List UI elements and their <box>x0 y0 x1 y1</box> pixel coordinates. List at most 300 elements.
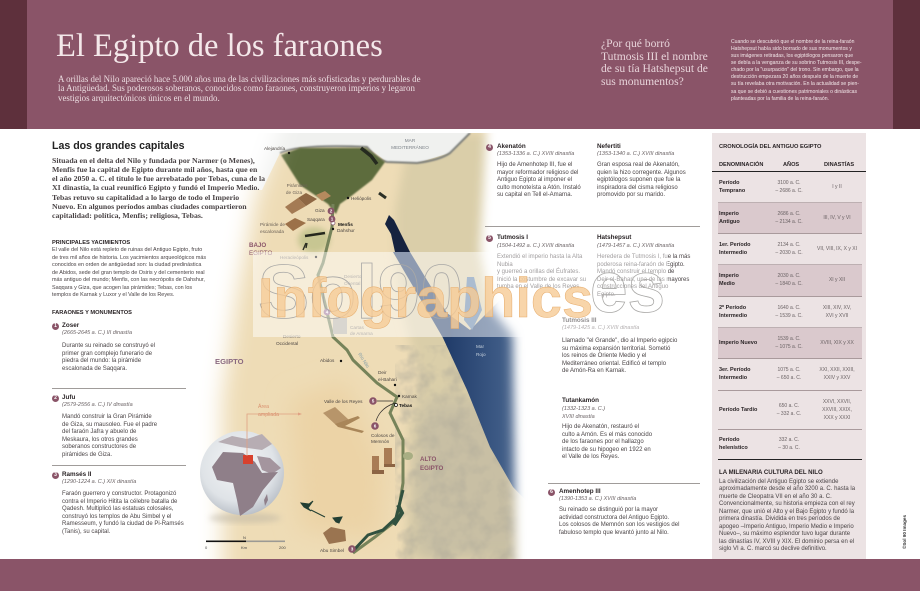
description <box>562 424 652 460</box>
map labels: el-Bahari <box>378 377 397 382</box>
icon: colossi of Memnon <box>372 448 395 474</box>
row: Período Tardío: – 332 a. C. <box>777 411 801 417</box>
capitals text: Nuevo. En algunos períodos ambas ciudades compartieron <box>52 202 247 211</box>
row: Período Temprano: I y II <box>832 184 842 190</box>
dates: (1479-1457 a. C.) XVIII dinastía <box>597 243 674 249</box>
watermark: Sol90 <box>258 250 463 335</box>
dates: (1504-1492 a. C.) XVIII dinastía <box>497 243 574 249</box>
description <box>562 338 678 374</box>
locator globe <box>200 431 284 523</box>
number marker <box>52 472 59 479</box>
map labels: Karnak <box>402 394 418 399</box>
map labels: Alejandría <box>264 146 286 151</box>
description: Llamado "el Grande", dio al Imperio egipcio <box>562 338 677 344</box>
description: Egipto. <box>597 292 616 298</box>
number marker <box>52 395 59 402</box>
map number markers: 1 <box>331 217 334 222</box>
description: pirámides de Giza. <box>62 452 112 458</box>
scale bar: N <box>243 535 246 540</box>
map labels: Cartas <box>350 325 364 330</box>
row: Período helenístico: 332 a. C. <box>779 437 799 443</box>
row: Período helenístico: – 30 a. C. <box>778 445 800 451</box>
heading: capitals: Las dos grandes capitales <box>52 140 184 152</box>
number marker: 4 <box>488 144 491 150</box>
footer band <box>0 559 920 591</box>
description: Los colosos de Memnón son los vestigios del <box>559 522 679 528</box>
row: Período Tardío: Período Tardío <box>719 407 757 413</box>
capitals text: Menfis fue la capital de Egipto durante mil años, hasta que en <box>52 165 257 174</box>
description: los reinos de Oriente Medio y el <box>562 353 646 359</box>
description: piedra del mundo: la pirámide <box>62 358 141 364</box>
description: Hijo de Amenhotep III, fue el <box>497 162 572 168</box>
map labels: Río Nilo <box>357 352 370 369</box>
side answer: sus imágenes retiradas, los egiptólogos pensaron que <box>731 53 853 59</box>
row: 3er. Período Intermedio: XXI, XXII, XXIII, <box>819 367 855 373</box>
main sites text: templos de Karnak y Luxor y el Valle de los Reyes. <box>52 292 174 298</box>
number marker: 3 <box>54 472 57 478</box>
map labels <box>260 138 486 553</box>
description: Mediterráneo oriental. Edificó el templo <box>562 360 666 366</box>
map labels: Heracleópolis <box>280 255 309 260</box>
dates: (1353-1336 a. C.) XVIII dinastía <box>497 151 574 157</box>
intro text <box>58 74 421 103</box>
map labels: Menfis <box>338 222 353 227</box>
label: Egipto: EGIPTO <box>215 357 244 366</box>
culture text: Narmer, que unió el Alto y el Bajo Egipto y fundó la <box>719 508 854 514</box>
number marker: 5 <box>488 235 491 241</box>
description: su máxima expansión territorial. Sometió <box>562 346 670 352</box>
callout: enlarged area: ampliada <box>258 412 279 418</box>
name: Tutmosis III <box>562 317 597 324</box>
description: (Tanis), su capital. <box>62 528 110 534</box>
name: Amenhotep III <box>559 488 601 495</box>
row: Período Tardío: 650 a. C. <box>779 403 799 409</box>
description: intacto de su hipogeo en 1922 en <box>562 446 651 452</box>
culture text <box>719 478 856 552</box>
main sites text <box>52 247 206 298</box>
description: Antiguo Egipto al imponer el <box>497 177 572 183</box>
panel: chronology <box>712 133 866 559</box>
number marker <box>486 235 493 242</box>
left dark strip <box>0 0 27 129</box>
row: Período Tardío <box>718 391 862 430</box>
description: de los faraones por el hallazgo <box>562 439 644 445</box>
name: Jufu <box>62 394 75 401</box>
side answer: Hatshepsut había sido borrado de sus monumentos y <box>731 46 852 52</box>
row: Imperio Antiguo: Antiguo <box>719 219 740 225</box>
row: 2º Período Intermedio: XVI y XVII <box>826 313 848 319</box>
description: Extendió el imperio hasta la Alta <box>497 254 582 260</box>
image credit: ©Sol 90 Images <box>902 515 907 549</box>
description: Qadesh. Multiplicó las estatuas colosales, <box>62 506 173 512</box>
description: primer gran complejo funerario de <box>62 350 152 356</box>
dates <box>562 406 605 420</box>
pharaoh: Nefertiti <box>597 143 686 198</box>
row: Imperio Nuevo: 1539 a. C. <box>777 336 801 342</box>
culture text: Convencionalmente, su historia empieza con el rey <box>719 501 855 507</box>
side answer: chado por la "usurpación" del trono. Sin embargo, que la <box>731 67 859 73</box>
map number markers: 6 <box>374 424 377 429</box>
number marker <box>52 323 59 330</box>
culture text: las dinastías IV, XVIII y XIX. El dominio persa en el <box>719 538 854 544</box>
row: Período Tardío: XXVIII, XXIX, <box>822 407 852 413</box>
panel: left column <box>52 140 265 316</box>
row: Imperio Antiguo: Imperio <box>719 211 739 217</box>
watermark: es <box>590 250 665 328</box>
description: Deir el-Bahari, una de las mayores <box>597 276 689 282</box>
description <box>62 490 184 534</box>
map labels: Desierto <box>344 274 362 279</box>
row: Imperio Medio: XI y XII <box>829 277 845 283</box>
map number markers: 3 <box>351 547 354 552</box>
nile <box>318 204 403 553</box>
row: Imperio Medio: 2030 a. C. <box>777 273 801 279</box>
description: y guerreó a orillas del Éufrates. <box>497 269 580 275</box>
map of Egypt <box>200 133 523 559</box>
dates: (1390-1353 a. C.) XVIII dinastía <box>559 496 636 502</box>
row: Imperio Antiguo: III, IV, V y VI <box>823 215 851 221</box>
row: 1er. Período Intermedio: 2134 a. C. <box>777 242 801 248</box>
map labels: Dahshur <box>337 228 355 233</box>
side answer <box>731 39 862 102</box>
map labels: Rojo <box>476 352 486 357</box>
side question: ¿Por qué borró <box>601 37 670 50</box>
red sea <box>443 304 522 496</box>
capitals text: el año 2050 a. C. el título le fue arrebatado por Tebas, cuna de la <box>52 174 265 183</box>
text block: Nile culture <box>719 469 856 552</box>
row: 2º Período Intermedio: 1640 a. C. <box>777 305 801 311</box>
intro text: vestigios arquitectónicos únicos en el mundo. <box>58 93 220 103</box>
pharaoh: Amenhotep III <box>548 488 680 536</box>
row: 2º Período Intermedio: – 1539 a. C. <box>775 313 803 319</box>
description: quien la hizo corregente. Algunos <box>597 170 686 176</box>
label: Bajo Egipto <box>249 242 272 257</box>
description: Faraón guerrero y constructor. Protagonizó <box>62 491 176 497</box>
scale bar: 200 <box>279 545 286 550</box>
main sites text: conocidos en orden de antigüedad son: la ciudad predinástica <box>52 262 201 268</box>
row: Imperio Nuevo: – 1075 a. C. <box>775 344 803 350</box>
watermark <box>258 250 665 335</box>
toshka lakes <box>301 501 342 523</box>
description: fabuloso templo que levantó junto al Nilo. <box>559 530 669 536</box>
icon: valley of the kings tomb <box>323 407 364 433</box>
culture text: apogeo –Imperio Antiguo, Imperio Medio e Imperio <box>719 524 854 530</box>
culture heading: LA MILENARIA CULTURA DEL NILO <box>719 469 823 476</box>
capitals text: XI dinastía, la cual reunificó Egipto y fundó el Imperio Medio. <box>52 183 259 192</box>
row: Imperio Nuevo <box>718 328 862 359</box>
map labels: Deir <box>378 370 387 375</box>
row: Período Tardío: XXX y XXXI <box>824 415 850 421</box>
title: El Egipto de los faraones <box>56 28 383 64</box>
column headers: AÑOS <box>783 162 799 168</box>
delta <box>281 148 385 214</box>
description: Hijo de Akenatón, restauró el <box>562 424 639 430</box>
name: Hatshepsut <box>597 234 631 241</box>
amarna box <box>333 318 347 334</box>
description: promovido por su marido. <box>597 192 665 198</box>
row: Imperio Medio <box>718 265 862 297</box>
description: del faraón Jafra y abuelo de <box>62 429 136 435</box>
description: escalonada de Saqqara. <box>62 366 127 372</box>
connector lines <box>376 401 395 421</box>
scale bar: 0 <box>205 545 208 550</box>
description: actividad constructora del Antiguo Egipto. <box>559 514 669 520</box>
name: Akenatón <box>497 143 526 150</box>
label: Bajo Egipto: EGIPTO <box>249 250 272 257</box>
row: Período helenístico <box>718 430 862 460</box>
row: 2º Período Intermedio: 2º Período <box>719 305 746 311</box>
map labels: MEDITERRÁNEO <box>391 144 429 150</box>
description: de Amón-Ra en Karnak. <box>562 368 626 374</box>
dates: (2665-2645 a. C.) III dinastía <box>62 330 132 336</box>
pharaoh: Ramsés II <box>52 471 184 534</box>
map labels: Pirámide de <box>260 222 285 227</box>
map labels: Tebas <box>399 403 413 408</box>
map labels: escalonada <box>260 229 284 234</box>
main sites text: El valle del Nilo está repleto de ruinas del Antiguo Egipto, fruto <box>52 247 202 253</box>
description: Gran esposa real de Akenatón, <box>597 162 680 168</box>
right dark strip <box>893 0 920 129</box>
description: Mandó construir la Gran Pirámide <box>62 414 152 420</box>
dates: (1290-1224 a. C.) XIX dinastía <box>62 479 136 485</box>
row: 1er. Período Intermedio <box>718 234 862 265</box>
row: Período Temprano: 3100 a. C. <box>777 180 801 186</box>
label: Alto Egipto: ALTO <box>420 456 436 463</box>
row: Período helenístico: helenístico <box>719 445 748 451</box>
capitals text: Tebas retuvo su capitalidad a lo largo de todo el Imperio <box>52 193 239 202</box>
description: Durante su reinado se construyó el <box>62 343 155 349</box>
description <box>62 414 157 458</box>
label: Alto Egipto: EGIPTO <box>420 465 443 472</box>
description <box>497 162 581 198</box>
description: egiptólogos suponen que fue la <box>597 177 680 183</box>
description: mayor reformador religioso del <box>497 170 578 176</box>
description: Heredera de Tutmosis I, fue la más <box>597 254 690 260</box>
row: 3er. Período Intermedio: 3er. Período <box>719 367 750 373</box>
row: Imperio Antiguo <box>718 203 862 234</box>
side answer: se debía a la venganza de su sobrino Tutmosis III, despe- <box>731 60 862 66</box>
culture text: aproximadamente desde el año 3200 a. C. hasta la <box>719 486 855 492</box>
column headers: DENOMINACIÓN <box>719 162 763 168</box>
row: Imperio Antiguo: – 2134 a. C. <box>775 219 803 225</box>
dates: (2579-2556 a. C.) IV dinastía <box>62 402 133 408</box>
land base <box>210 133 512 559</box>
row: 1er. Período Intermedio: 1er. Período <box>719 242 750 248</box>
dates: (1479-1425 a. C.) XVIII dinastía <box>562 325 639 331</box>
row: 3er. Período Intermedio <box>718 359 862 391</box>
main sites text: Saqqara y Giza, que acogen las pirámides; Tebas, con los <box>52 284 192 290</box>
pharaoh: Akenatón <box>486 143 581 198</box>
pharaoh: Tutankamón <box>562 397 652 460</box>
row: Período helenístico: Período <box>719 437 739 443</box>
map labels: Memnón <box>371 439 390 444</box>
chronology title: CRONOLOGÍA DEL ANTIGUO EGIPTO <box>719 144 821 150</box>
description: soberanos constructores de <box>62 444 136 450</box>
row: Imperio Nuevo: XVIII, XIX y XX <box>820 340 854 346</box>
map labels: de Amarna <box>350 331 373 336</box>
number marker: 6 <box>550 489 553 495</box>
description <box>597 162 686 198</box>
side answer: planteadas por la familia de la reina-faraón. <box>731 96 829 102</box>
description: de Giza, su mausoleo. Fue el padre <box>62 422 157 428</box>
site dots <box>288 152 400 397</box>
side question <box>601 37 708 88</box>
map number markers: 5 <box>372 399 375 404</box>
description: el Valle de los Reyes. <box>562 454 619 460</box>
row: Período Temprano: – 2686 a. C. <box>775 188 803 194</box>
dates: (1332-1323 a. C.) <box>562 406 605 412</box>
header band <box>0 0 920 129</box>
dates: XVIII dinastía <box>562 414 595 420</box>
row: Período Temprano: Temprano <box>719 188 745 194</box>
row: 3er. Período Intermedio: 1075 a. C. <box>777 367 801 373</box>
description: contra el Imperio Hitita la célebre batalla de <box>62 498 177 504</box>
description: Mandó construir el templo de <box>597 269 674 275</box>
site rings <box>331 221 398 406</box>
description: su capital en Tell el-Amarna. <box>497 192 572 198</box>
main sites text: más antiguo del mundo; Menfis, con las necrópolis de Dahshur, <box>52 277 205 283</box>
number marker <box>486 144 493 151</box>
description: culto a Amón. Es el más conocido <box>562 432 652 438</box>
row: Período Temprano: Período <box>719 180 739 186</box>
pharaoh: Tutmosis III <box>562 317 678 374</box>
map number markers: 2 <box>330 209 333 214</box>
map labels: Valle de los Reyes <box>324 399 363 404</box>
map labels: Colosos de <box>371 433 395 438</box>
row: 2º Período Intermedio: XIII, XIV, XV, <box>823 305 851 311</box>
mediterranean sea <box>247 133 470 190</box>
main sites text: de tres mil años de historia. Los yacimientos arqueológicos más <box>52 254 206 260</box>
column headers <box>712 160 866 172</box>
row: 3er. Período Intermedio: – 650 a. C. <box>777 375 801 381</box>
scale bar <box>205 535 286 550</box>
capitals text <box>52 156 265 220</box>
description <box>497 254 586 290</box>
description <box>62 342 155 372</box>
description: construcciones del Antiguo <box>597 284 668 290</box>
pharaoh: Hatshepsut <box>597 234 690 298</box>
description: tumba en el Valle de los Reyes. <box>497 284 581 290</box>
side answer: sa que se debió a cuestiones patrimoniales o dinásticas <box>731 89 857 95</box>
heading: pharaohs: FARAONES Y MONUMENTOS <box>52 310 132 316</box>
callout: enlarged area <box>247 403 302 456</box>
description: Inició la costumbre de excavar su <box>497 276 586 282</box>
description: Nubia <box>497 262 513 268</box>
map labels: MAR <box>405 138 416 143</box>
main sites text: de Abidos, sede del gran templo de Osiris y del cementerio real <box>52 270 205 276</box>
pharaoh: Zoser <box>52 322 155 372</box>
map labels: Saqqara <box>307 217 325 222</box>
label: Bajo Egipto: BAJO <box>249 242 266 249</box>
intro text: A orillas del Nilo apareció hace 5.000 años una de las civilizaciones más sofisticadas y perdurables de <box>58 74 421 84</box>
description: Meskaura, los otros grandes <box>62 436 138 442</box>
map labels: Abidos <box>320 358 335 363</box>
western oases <box>298 227 330 253</box>
side question: Tutmosis III el nombre <box>601 50 708 63</box>
dates: (1353-1340 a. C.) XVIII dinastía <box>597 151 674 157</box>
description: Ramesseum, y fundó la ciudad de Pi-Ramsés <box>62 521 184 527</box>
row: 3er. Período Intermedio: Intermedio <box>719 375 747 381</box>
row: Imperio Medio: – 1840 a. C. <box>775 281 803 287</box>
map labels: Abu Simbel <box>320 548 344 553</box>
culture text: muerte de Cleopatra VII en el año 30 a. C. <box>719 494 832 500</box>
culture text: Nuevo–, su máximo esplendor tuvo lugar durante <box>719 531 850 537</box>
row: 1er. Período Intermedio: Intermedio <box>719 250 747 256</box>
description: construyó los templos de Abu Simbel y el <box>62 514 171 520</box>
description: Su reinado se distinguió por la mayor <box>559 507 658 513</box>
gulf of suez <box>385 215 410 252</box>
culture text: La civilización del Antiguo Egipto se extiende <box>719 478 838 484</box>
name: Ramsés II <box>62 471 91 478</box>
row: Imperio Medio: Imperio <box>719 273 739 279</box>
callout: enlarged area: Área <box>258 403 269 410</box>
icon: Abu Simbel temple <box>323 527 346 544</box>
pharaoh: Jufu <box>52 394 157 458</box>
name: Nefertiti <box>597 143 621 150</box>
capitals text: capitalidad: política, Menfis; religiosa, Tebas. <box>52 211 203 220</box>
row: Imperio Nuevo: Imperio Nuevo <box>719 340 757 346</box>
map labels: Giza <box>315 208 325 213</box>
description: inspiradora del cisma religioso <box>597 184 678 190</box>
map labels: de Giza <box>286 190 302 195</box>
map labels: Mar <box>476 344 485 349</box>
name: Tutankamón <box>562 397 599 404</box>
culture text: siglo VI a. C. marcó su declive definitivo. <box>719 546 827 552</box>
icon: stepped pyramid <box>285 218 306 231</box>
description <box>597 254 690 298</box>
description <box>559 506 680 536</box>
row: Imperio Medio: Medio <box>719 281 735 287</box>
number marker <box>548 489 555 496</box>
row: Período Tardío: XXVI, XXVII, <box>823 399 851 405</box>
row: 2º Período Intermedio <box>718 297 862 328</box>
side answer: destrucción empezara 20 años después de la muerte de <box>731 74 858 80</box>
map labels: Heliópolis <box>351 196 372 201</box>
map labels: Desierto <box>283 334 301 339</box>
intro text: la Antigüedad. Sus poderosos soberanos, conocidos como faraones, construyeron imperios y legaron <box>58 83 415 93</box>
name: Tutmosis I <box>497 234 528 241</box>
row: Imperio Antiguo: 2686 a. C. <box>777 211 801 217</box>
culture text: primera dinastía. Dividida en tres períodos de <box>719 516 840 522</box>
side question: sus monumentos? <box>601 75 684 88</box>
icon: pyramids of Giza <box>285 191 331 214</box>
capitals text: Situada en el delta del Nilo y fundada por Narmer (o Menes), <box>52 156 255 165</box>
heading: main sites: PRINCIPALES YACIMIENTOS <box>52 240 130 246</box>
row: 1er. Período Intermedio: VII, VIII, IX, X y XI <box>817 246 857 252</box>
side answer: su tía revelaba otra motivación. En la actualidad se pien- <box>731 81 859 87</box>
side question: de su tía Hatshepsut de <box>601 62 708 75</box>
number marker: 2 <box>54 395 57 401</box>
map labels: Occidental <box>276 341 298 346</box>
pharaoh: Tutmosis I <box>486 234 586 290</box>
row: 3er. Período Intermedio: XXIV y XXV <box>824 375 850 381</box>
row: 1er. Período Intermedio: – 2030 a. C. <box>775 250 803 256</box>
row: 2º Período Intermedio: Intermedio <box>719 313 747 319</box>
row: Período Temprano <box>718 172 862 203</box>
scale bar: Km <box>241 545 248 550</box>
number marker: 1 <box>54 323 57 329</box>
name: Zoser <box>62 322 79 329</box>
map number markers <box>324 208 379 553</box>
watermark: Infographics <box>258 266 593 329</box>
description: poderosa reina-faraón de Egipto. <box>597 262 685 268</box>
watermark band <box>253 252 668 337</box>
map labels: Pirámides <box>287 183 308 188</box>
column headers: DINASTÍAS <box>824 162 854 168</box>
side answer: Cuando se descubrió que el nombre de la reina-faraón <box>731 39 854 45</box>
label: Alto Egipto <box>420 456 443 472</box>
map number markers: 4 <box>326 310 329 315</box>
